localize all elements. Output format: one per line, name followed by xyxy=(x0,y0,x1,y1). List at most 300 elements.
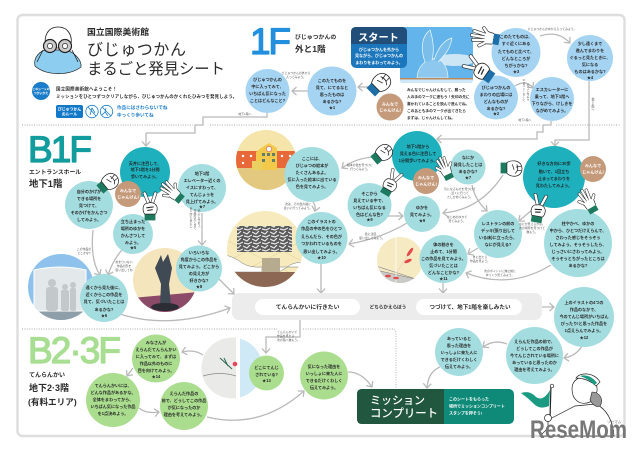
choice band xyxy=(232,293,542,320)
circle: stand still: 止めて、1分間 xyxy=(430,248,457,254)
circle: angles: の見え方が xyxy=(189,270,209,276)
circle: inside museum: 中に入ってみて、 xyxy=(251,83,284,89)
circle: stand still: どんなことかな? xyxy=(428,269,460,275)
circle: discoveries: 発見したことは xyxy=(454,161,482,167)
image: museum sculpture in sky xyxy=(400,27,475,84)
janken 1F xyxy=(376,94,404,120)
small notes: 気になるものを見つけて xyxy=(444,186,476,191)
circle: restaurant deck: なにが見える? xyxy=(485,241,512,247)
circle: other than works: に入ってみて、まずは xyxy=(136,353,176,359)
choice band: どちらかえらぼう xyxy=(370,304,406,310)
circle: discoveries: あるかな? xyxy=(459,168,478,174)
museum rules badge: のルール xyxy=(62,112,77,116)
circle: look up: 見上げてみよう。 xyxy=(186,198,218,204)
circle: stand still: この作品を見てみよう。 xyxy=(421,255,466,261)
heading: B2-3F: 地下2·3階 xyxy=(29,382,69,393)
circle: tell companion: 気になった理由を xyxy=(308,363,340,369)
janken B1F centre: みんなで xyxy=(418,174,434,180)
circle: angles: いろいろな xyxy=(189,249,209,255)
circle: tell companion: できるだけくわしく xyxy=(306,377,342,383)
circle: ceiling walk: 地下1階を1分間 xyxy=(130,166,160,172)
circle: touch imagination: 中から、ひとつだけえらんで、 xyxy=(550,227,606,233)
start instructions: 書かれていることを読んで進んでね。 xyxy=(407,101,469,106)
hand: rock right xyxy=(501,161,522,176)
circle: picture books: 色を見てみよう。 xyxy=(296,183,328,189)
small notes xyxy=(77,26,595,342)
circle: touch imagination: 柱やかべ、ゆかの xyxy=(562,220,594,226)
circle: discoveries xyxy=(450,150,486,184)
circle: inside museum: ことはどんなこと? xyxy=(250,97,286,103)
small notes: たしかめてみよう。 xyxy=(447,194,473,199)
circle: favourite colour: そこから xyxy=(361,190,378,196)
small notes: 地下1階へ xyxy=(238,111,252,116)
small notes: 絵本の色を見つけに xyxy=(347,162,373,167)
image: gallery corner with flower xyxy=(202,338,260,398)
hand: paper centre xyxy=(433,155,457,182)
mission complete panel: コンプリート xyxy=(370,407,438,420)
small notes: 次のポイントに進む前に xyxy=(484,268,516,273)
circle: look at floor: 見てみよう。 xyxy=(410,211,434,217)
heading: B2-3F xyxy=(28,330,121,407)
circle: picture books: ここには、 xyxy=(302,156,322,161)
small notes: てんらんかいで xyxy=(277,329,297,334)
heading: B1F: エントランスホール xyxy=(29,169,81,176)
heading: 1F: びじゅつかんの xyxy=(295,33,336,41)
mission complete panel: ミッション xyxy=(370,395,425,407)
circle: touch imagination: じっさいにさわってみよう。 xyxy=(552,248,604,254)
circle: tell companion xyxy=(300,352,348,400)
circle: discoveries: なにか xyxy=(462,154,475,160)
circle: illustration colour: 作品の中の色をひとつ xyxy=(301,225,342,231)
circle: why this place: えらんだ作品の前で、 xyxy=(514,338,555,344)
circle: escalator: 乗って、地下1階へ xyxy=(535,93,569,99)
janken 1F: じゃんけん! xyxy=(379,106,401,112)
hand: peace 1F xyxy=(463,55,497,85)
circle: angles: 角度からこの作品を xyxy=(181,256,217,262)
header block xyxy=(32,26,237,118)
image: plant artwork xyxy=(377,237,422,283)
small notes: 作品の近くまで xyxy=(193,207,197,229)
circle: look up: ★7 xyxy=(199,204,206,209)
janken B1F left xyxy=(115,181,141,207)
circle: escalator xyxy=(530,77,574,121)
circle: share reason: いっしょに来た人に xyxy=(441,349,477,355)
icon: no touching xyxy=(86,105,98,118)
circle: why interested: えらんだ作品の xyxy=(170,390,198,396)
circle: compare: ちがうかな? xyxy=(505,62,528,68)
start instructions xyxy=(407,87,470,120)
circle: escalator: エスカレーターに xyxy=(536,86,568,92)
circle: far and near: 遠くから見た後に、 xyxy=(86,284,122,290)
circle: stand still: 体の動きを xyxy=(433,241,454,247)
circle: ceiling walk xyxy=(120,147,170,197)
circle: stand still: 気づいたことは xyxy=(429,262,458,268)
museum name: 国立国際美術館 xyxy=(87,26,149,37)
small notes: 外に出たら xyxy=(473,254,487,259)
circle: favourite colour xyxy=(348,183,392,227)
circle: share reason: 思った理由を xyxy=(447,342,471,348)
circle: restaurant deck: いる床)に立ったら、 xyxy=(479,234,517,240)
circle: colours walk xyxy=(392,131,442,181)
icon: child with binoculars xyxy=(35,27,81,74)
rules text: 作品にはさわらないでね xyxy=(117,104,168,111)
panel: start: 見ながら、びじゅつかんの xyxy=(355,52,403,58)
circle: walk around xyxy=(567,35,613,81)
circle: floor: かんさつして xyxy=(121,232,145,238)
circle: walk around: 気になる xyxy=(582,61,598,67)
small notes: 歩いてみよう。 xyxy=(197,207,201,229)
small notes: どこかな? xyxy=(77,250,91,255)
heading: B2-3F: B2·3F xyxy=(28,330,121,371)
circle: thirty steps xyxy=(523,146,585,208)
title: びじゅつかん xyxy=(87,41,186,59)
circle: thirty steps: 動いて、1回立ち xyxy=(539,168,569,174)
circle: choose one: を1点決めよう。 xyxy=(98,410,128,416)
circle: plaza: あるかな? xyxy=(487,105,506,111)
circle: picture books: びじゅつの絵本が xyxy=(296,162,328,168)
circle: choose one: いちばん気になった作品 xyxy=(90,403,136,409)
circle: why this place: 今てんじされている場所に xyxy=(510,352,559,358)
circle: inside museum xyxy=(246,69,290,113)
circle: why interested xyxy=(160,382,208,430)
arrows xyxy=(92,34,589,420)
circle: angles xyxy=(176,246,222,292)
heading: B1F: 地下1階 xyxy=(29,178,63,189)
janken B1F left: じゃんけん! xyxy=(117,194,139,200)
start instructions: みんなでじゃんけんをして、勝った xyxy=(407,87,466,92)
janken B1F left: みんなで xyxy=(120,187,136,193)
circle: escalator: 下りながら、けしきを xyxy=(532,100,572,106)
small notes: 次の場所を見つけて xyxy=(519,225,545,230)
circle: favourite colour: 見えている中で、 xyxy=(353,197,386,203)
circle: look up xyxy=(178,164,226,212)
circle: why this place: 理由を考えてみよう。 xyxy=(514,366,555,372)
circle: floor: 場所のゆかを xyxy=(121,225,145,231)
circle: share reason: できるだけくわしく xyxy=(441,356,477,362)
circle: look at floor xyxy=(404,196,440,232)
circle: walk around: ぐるっと見たときに、 xyxy=(570,54,610,60)
circle: inside museum: いちばん気になった xyxy=(249,90,286,96)
circle: shadow xyxy=(65,181,113,229)
circle: compare: ★3 xyxy=(513,69,520,74)
badge: how to use: このシートの xyxy=(32,86,50,91)
circle: illustration colour: このイラストの xyxy=(307,218,336,224)
janken badges xyxy=(115,94,606,207)
small notes: 思い出してね xyxy=(115,267,133,272)
hands xyxy=(95,26,601,224)
museum rules badge xyxy=(56,105,83,118)
circle: similar building: ★1 xyxy=(329,105,336,110)
small notes: ゆっくり見てみよう。 xyxy=(486,272,514,277)
circle: why interested: が気になったのか xyxy=(168,404,201,410)
circle: discoveries: ★7 xyxy=(465,175,472,180)
museum rules badge: びじゅつかん xyxy=(58,106,81,112)
small notes: 作品の形を xyxy=(117,263,131,268)
mission complete panel xyxy=(357,389,514,424)
circle: plaza xyxy=(474,76,518,120)
small notes: 作品を見たら、 xyxy=(277,333,297,338)
heading: 1F: 外と1階 xyxy=(295,43,326,54)
circle: four works: 作品のなかで、 xyxy=(570,306,598,312)
circle: walk around: ★4 xyxy=(587,75,594,80)
circle: choose one xyxy=(86,373,140,427)
circle: floor: 立ち止まった xyxy=(121,218,145,224)
choice band: てんらんかいに行きたい xyxy=(276,303,340,311)
circle: four works: ぴったり!と思った作品を xyxy=(561,320,607,326)
circle: far and near: あるかな? xyxy=(95,306,114,312)
circle: colours walk: 1分間歩いてみよう。 xyxy=(399,157,437,163)
small notes: 見てみよう。 xyxy=(448,218,466,223)
panel: start: まわりをまわってみよう。 xyxy=(355,59,403,65)
circle: touch imagination: さわった感じをそうぞう xyxy=(555,234,601,240)
circle: where shown xyxy=(249,356,284,390)
circle: compare: たてものと比べて、 xyxy=(498,48,534,54)
circle: other than works xyxy=(132,334,180,382)
character with flag xyxy=(521,374,614,436)
small notes: あまりいない xyxy=(115,259,133,264)
circle: picture books: 気に入った絵本に出ている xyxy=(287,176,337,182)
small notes: 思い出してみよう。 xyxy=(359,235,385,240)
small notes: 進もう。 xyxy=(526,229,538,234)
circle: similar building: このたてものを xyxy=(318,77,346,83)
rules text: ゆっくり歩いてね xyxy=(117,112,154,118)
circle: look up: イスにすわって、 xyxy=(186,184,218,190)
circle: plaza: まわりの広場には xyxy=(480,91,512,97)
circle: shadow: できる場所を xyxy=(77,195,101,201)
intro text: 国立国際美術館へようこそ！ xyxy=(56,86,117,92)
circle: favourite colour: 色はどんな色? xyxy=(356,211,384,217)
circle: other than works: みなさんが xyxy=(146,339,166,345)
small notes: 地下1階へ xyxy=(518,117,532,122)
badge: how to use: つかいかた xyxy=(34,90,48,95)
circle: restaurant deck: レストランの前の xyxy=(482,220,514,226)
small notes: びじゅつかんの中から入ってみよう。 xyxy=(528,26,576,31)
circle: look up: エレベーター近くの xyxy=(184,177,220,183)
circle: thirty steps: 見わたしてみよう。 xyxy=(536,182,572,188)
circle: similar building: 思ったものは xyxy=(320,91,344,97)
circle: touch imagination: そうぞうとちがったところは xyxy=(551,255,605,261)
circle: other than works: 目を向けてみよう。 xyxy=(138,367,174,373)
circle: stand still: ★11 xyxy=(439,276,448,281)
circle: compare: どんなところが xyxy=(502,55,530,61)
rules text xyxy=(117,104,168,118)
choice band: つづけて、地下1階を楽しみたい xyxy=(429,303,511,311)
circle: why this place: どうしてこの作品が xyxy=(516,345,553,351)
small notes: 地下1階へ xyxy=(591,96,595,111)
heading: B1F xyxy=(28,129,92,189)
circle: plaza: ★2 xyxy=(493,111,500,116)
small notes: 次の階へ進もう。 xyxy=(277,337,300,342)
heading: B2-3F: (有料エリア) xyxy=(28,396,77,407)
circle: colours walk: 見える色に注目して xyxy=(400,150,436,156)
circle: similar building xyxy=(308,66,356,116)
circle: floor: みよう。 xyxy=(125,239,141,245)
circle: look up: 地下1階 xyxy=(195,170,209,176)
circle: illustration colour: ★10 xyxy=(317,255,327,260)
circle: look up: てんじょうを xyxy=(190,191,214,197)
circle: favourite colour: ★9 xyxy=(366,217,373,222)
circle: why this place: あっていると思ったのか xyxy=(512,359,558,365)
circle: restaurant deck: デッキ(張り出して xyxy=(481,227,515,233)
heading: B2-3F: てんらんかい xyxy=(29,372,65,379)
icon: no running xyxy=(100,105,113,118)
start instructions: 人の手のマークに進もう！矢印の先に xyxy=(407,94,470,99)
circle: ceiling walk: 歩いてみよう。 xyxy=(131,173,159,179)
start instructions: このあとも手のマークが出てきたら xyxy=(407,108,466,113)
heading: B1F: B1F xyxy=(28,129,92,170)
circle: why this place xyxy=(506,327,563,384)
watermark: リセマム xyxy=(607,419,622,424)
small notes: 近くに行って xyxy=(451,190,469,195)
circle: restaurant deck xyxy=(474,210,522,258)
small notes: のってみよう xyxy=(526,83,530,101)
circle: other than works: えらんだてんらんかい xyxy=(136,346,176,352)
heading: 1F: 1F xyxy=(250,21,291,62)
circle: four works: 上のイラストの4つの xyxy=(564,299,604,305)
mission complete panel: このシートをもらった xyxy=(449,396,489,402)
badge: how to use xyxy=(32,82,50,100)
circle: picture books: たくさんあるよ。 xyxy=(296,169,328,175)
janken B1F right: じゃんけん! xyxy=(582,168,604,174)
small notes: はじめのゆかで xyxy=(447,214,467,219)
circle: where shown: ★13 xyxy=(262,378,272,383)
circle: choose one: てんらんかいには、 xyxy=(95,382,131,388)
circle: favourite colour: いちばん気になる xyxy=(353,204,386,210)
small notes: 見上げたあとに、 xyxy=(189,206,193,231)
intro text line 2: ミッションをひとつずつクリアしながら、びじゅつかんのかくれたひみつを発見しよう。 xyxy=(56,93,237,100)
circle: floor xyxy=(113,214,153,254)
circle: illustration colour: えらんだら、その色が xyxy=(301,233,342,239)
circle: look at floor: ★9 xyxy=(419,218,426,223)
circle: shadow: 見つけて、 xyxy=(79,202,99,208)
small notes: 次は、その色の絵に xyxy=(285,201,311,206)
mission complete panel: スタンプを押そう! xyxy=(449,410,482,416)
circle: similar building: あるかな? xyxy=(323,98,342,104)
start instructions: まずは、じゃんけんしてね。 xyxy=(407,115,455,120)
circle: angles: 見てみよう。どこから xyxy=(179,263,219,269)
circle: four works xyxy=(554,287,614,347)
small notes: 作品を見よう。 xyxy=(470,258,490,263)
janken B1F centre: じゃんけん! xyxy=(415,180,437,186)
circle: other than works: 作品以外のものに xyxy=(140,360,172,366)
circle: far and near xyxy=(80,274,128,322)
circle: why interested: 理由を考えてみよう。 xyxy=(164,411,204,417)
small notes: エスカレーターに xyxy=(522,78,526,102)
image: picture book building xyxy=(235,129,297,192)
1F circles xyxy=(246,28,613,121)
circle: shadow: 自分のかげが xyxy=(77,188,101,194)
circle: walk around: 少し遠くまで xyxy=(578,40,602,46)
circle: ceiling walk: 天井に注目して、 xyxy=(129,160,161,166)
circle: choose one: 全体をまわってから、 xyxy=(93,396,133,402)
small notes: 入ってみよう。 xyxy=(286,74,306,79)
circle: four works: ★12 xyxy=(580,335,589,340)
B2-3F circles xyxy=(86,334,348,430)
title line 2: まるごと発見シート xyxy=(87,60,225,78)
circle: touch imagination: あるかな? xyxy=(569,262,588,268)
hand: rock B1F xyxy=(95,170,122,196)
circle: similar building: 見て、にてるなと xyxy=(316,84,348,90)
circle: share reason xyxy=(435,328,483,376)
circle: shadow: してみよう。 xyxy=(77,216,101,222)
circle: why interested: 前で、どうしてこの作品 xyxy=(162,397,206,403)
panel: start: スタート xyxy=(358,32,399,44)
hand: paper 1F xyxy=(470,26,501,49)
circle: illustration colour: 思い出してみよう。 xyxy=(303,248,340,254)
image: mural on gallery wall xyxy=(226,210,304,288)
circle: picture books xyxy=(284,147,340,202)
circle: share reason: 伝えてみよう。 xyxy=(445,363,473,369)
circle: walk around: 進んでまわりを xyxy=(576,47,604,53)
circle: tell companion: いっしょに来た人に xyxy=(306,370,342,376)
hand: peace B1F xyxy=(143,193,157,220)
circle: far and near: 近くからこの作品を xyxy=(86,291,122,297)
circle: where shown: どこにてんじ xyxy=(254,364,279,370)
circle: illustration colour: つかわれているものを xyxy=(301,240,342,246)
janken B1F right: みんなで xyxy=(585,162,601,168)
small notes: なにが見えるかな。 xyxy=(519,221,545,226)
hand: peace centre xyxy=(379,169,403,198)
circle: share reason: あっていると xyxy=(447,335,471,341)
small notes: 行ってみよう。 xyxy=(350,166,370,171)
circle: choose one: どんな作品があるかな。 xyxy=(90,389,136,395)
small notes: この作品の xyxy=(77,246,91,251)
image: dark sculpture xyxy=(132,248,198,314)
hand: peace right xyxy=(529,195,548,224)
circle: four works: 1点えらんでみよう。 xyxy=(565,327,603,333)
circle: plaza: どんなものが xyxy=(484,98,508,104)
circle: colours walk: 地下1階から xyxy=(407,143,429,149)
circle: stand still xyxy=(420,235,468,283)
circle: thirty steps: 好きな方向に30歩 xyxy=(537,160,571,166)
circle: four works: 今のてんじ場所がいちばん xyxy=(559,313,609,319)
panel: start: びじゅつかんを外から xyxy=(359,46,399,52)
heading: 1F xyxy=(250,21,336,62)
circle: where shown: されている? xyxy=(255,371,278,377)
circle: touch imagination: してみよう。そうぞうしたら、 xyxy=(550,241,606,247)
circle: floor: ★5 xyxy=(130,245,137,250)
circle: tell companion: 伝えてみよう。 xyxy=(310,384,338,390)
circle: compare: このたてものは、 xyxy=(500,33,532,39)
circle: other than works: ★14 xyxy=(152,374,161,379)
circle: plaza: びじゅつかんの xyxy=(482,84,510,90)
circle: far and near: 見て、気づいたことは xyxy=(84,298,124,304)
circle: angles: ★8 xyxy=(196,284,203,289)
small notes: びじゅつかんの外から xyxy=(282,70,311,75)
circle: illustration colour xyxy=(296,212,348,264)
circle: escalator: ながめてみよう。 xyxy=(536,107,568,113)
image: visitors behind glass xyxy=(28,254,94,322)
janken B1F right xyxy=(580,156,606,182)
hand: paper right xyxy=(575,187,601,216)
small notes: 色に注目、 xyxy=(365,231,379,236)
circle: compare xyxy=(492,28,540,77)
circle: walk around: ものはあるかな? xyxy=(574,68,606,74)
circle: inside museum: びじゅつかんの xyxy=(253,76,282,82)
circle: look at floor: ゆかを xyxy=(416,204,428,210)
B1F circles xyxy=(65,131,614,384)
circle: angles: 好きかな? xyxy=(190,277,209,283)
janken 1F: みんなで xyxy=(382,100,398,106)
circle: compare: すぐ近くにある xyxy=(502,40,530,46)
circle: far and near: ★6 xyxy=(101,313,108,318)
circle: touch imagination xyxy=(544,209,612,277)
circle: shadow: そのかげをかんさつ xyxy=(71,209,107,215)
hand: rock centre xyxy=(369,141,396,167)
hand: paper B1F xyxy=(158,178,187,206)
small notes: 会いに行ってみよう。 xyxy=(284,205,312,210)
panel: start xyxy=(351,27,407,68)
